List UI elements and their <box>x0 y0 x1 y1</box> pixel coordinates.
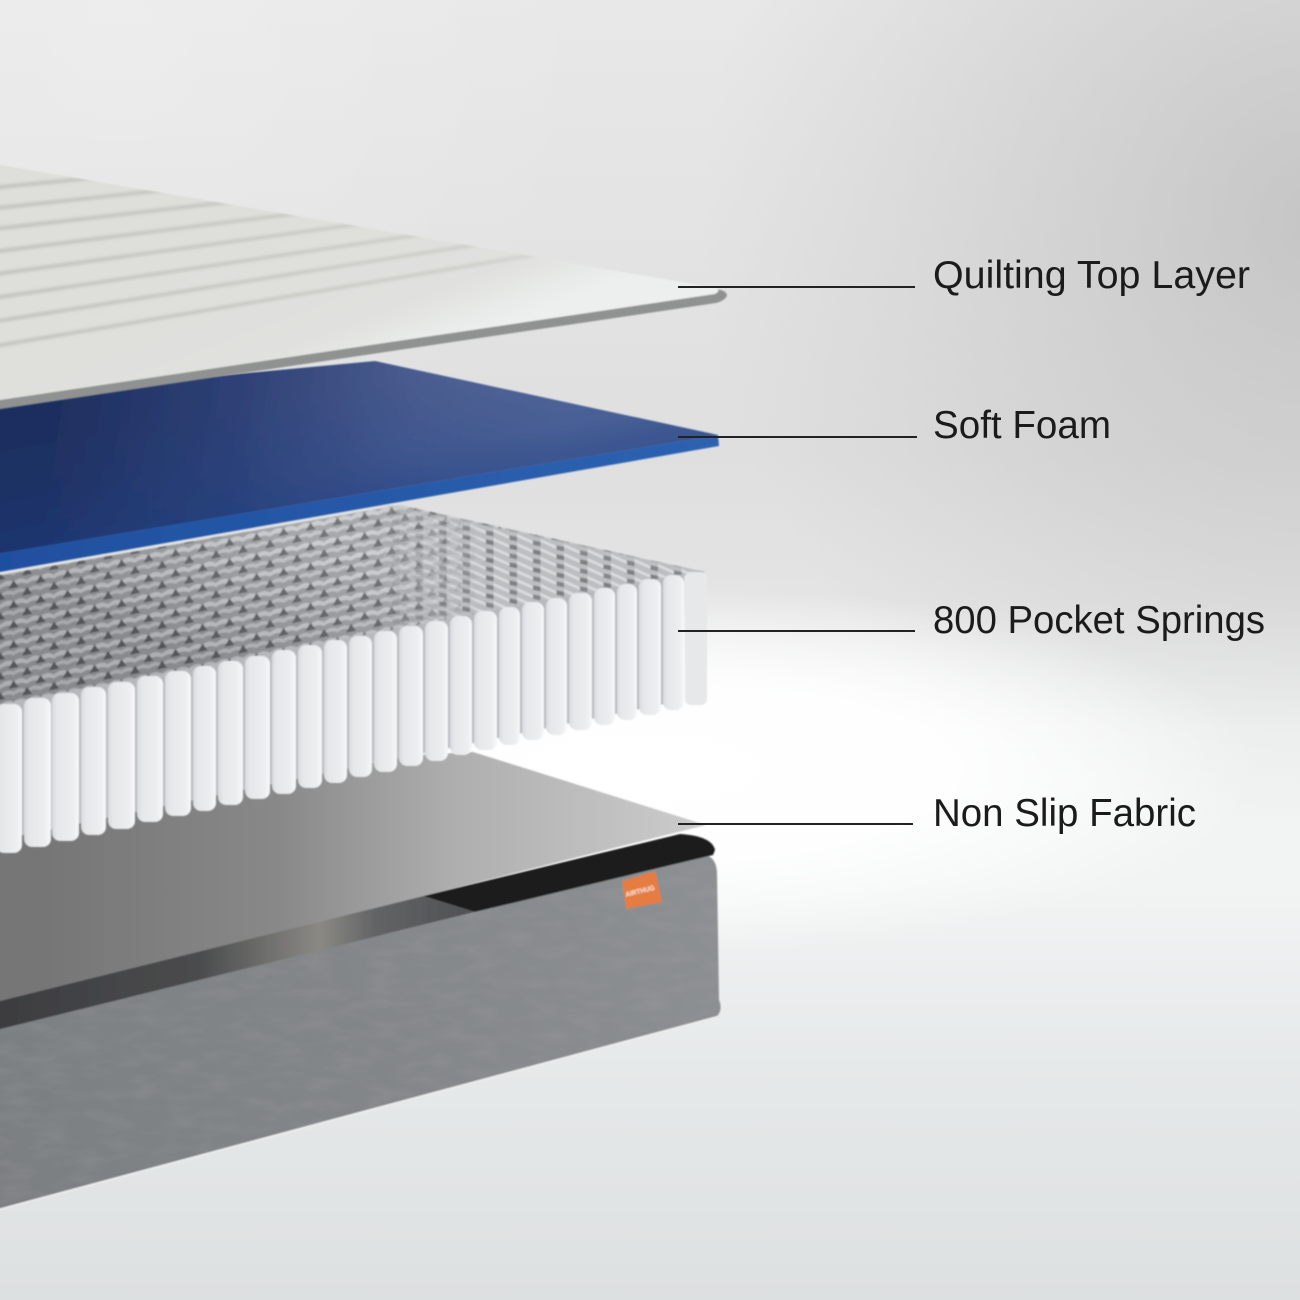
pocket springs layer <box>0 503 707 859</box>
label: soft foam: Soft Foam <box>933 404 1111 447</box>
leader line: non slip fabric <box>678 823 913 825</box>
label: quilting top layer: Quilting Top Layer <box>933 254 1250 297</box>
spring columns <box>0 575 684 859</box>
soft foam layer <box>0 361 719 579</box>
spring top surface front <box>0 505 705 712</box>
non slip fabric sheet <box>0 752 706 1011</box>
gap backing <box>0 574 684 848</box>
quilt edge <box>0 289 727 415</box>
leader line: quilting top layer <box>678 286 915 288</box>
spring top surface back <box>380 503 705 632</box>
orange tag: AIRTHUG <box>625 885 656 899</box>
mattress base with non slip fabric <box>0 752 721 1220</box>
end spring column <box>685 572 707 705</box>
leader line: soft foam <box>678 436 917 438</box>
orange tag <box>622 871 662 909</box>
quilt stripes <box>0 178 530 348</box>
label: 800 pocket springs: 800 Pocket Springs <box>933 599 1265 642</box>
black piping <box>423 834 715 912</box>
light floor edge <box>0 1017 717 1220</box>
mattress side <box>0 855 721 1219</box>
dark band <box>0 896 475 1039</box>
leader line: pocket springs <box>678 630 915 632</box>
quilt surface <box>0 158 718 406</box>
surface shading <box>0 505 705 712</box>
label: non slip fabric: Non Slip Fabric <box>933 792 1196 835</box>
foam front edge <box>0 435 719 579</box>
foam lower shading <box>0 361 718 560</box>
foam top surface <box>0 361 718 560</box>
quilting top layer <box>0 165 728 410</box>
